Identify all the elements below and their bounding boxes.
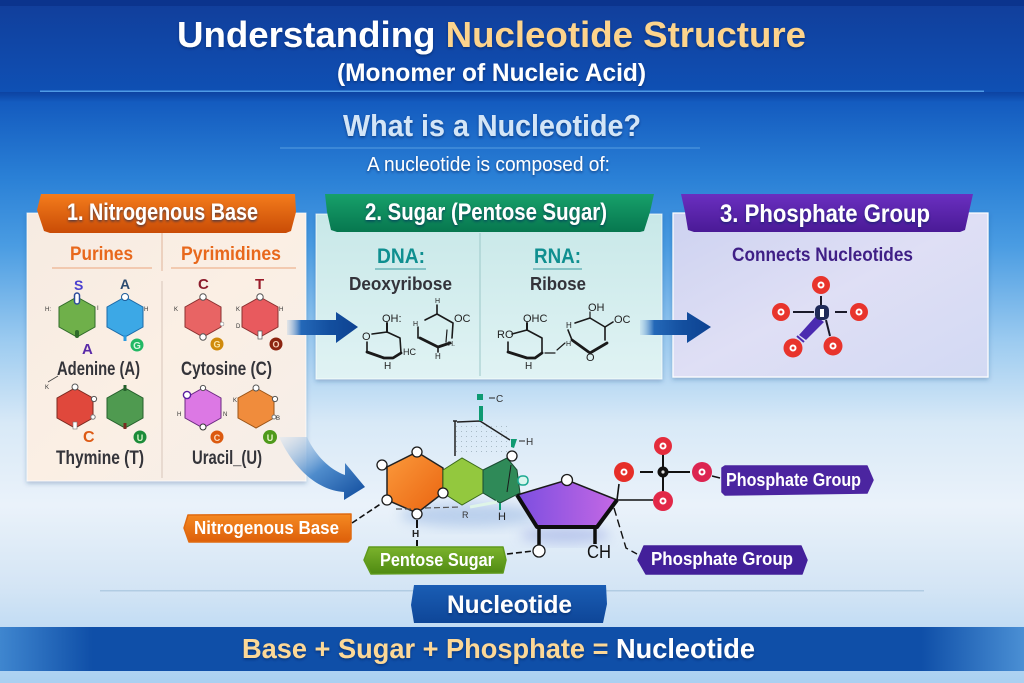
panel: sugar: RO [497,329,514,341]
icon: red pyrimidine hexagon C: K [174,307,178,313]
title: Understanding Nucleotide Structure [177,14,806,55]
hydrogen bond ring: C [496,394,503,405]
icon: orange hexagon: B [276,416,280,422]
arrow: base to sugar [287,312,358,343]
hydrogen bond ring [453,394,533,456]
panel: sugar: H. [448,341,455,348]
icon: red pyrimidine hexagon T: D [236,324,241,330]
section heading: What is a Nucleotide? [343,108,641,143]
icon: orange hexagon [233,385,280,444]
icon: red pyrimidine hexagon T: T [255,276,264,293]
heading: pyrimidines: Pyrimidines [181,244,281,265]
panel: sugar: O [362,331,371,343]
banner: sugar: 2. Sugar (Pentose Sugar) [365,199,607,226]
panel: sugar [316,214,662,379]
panel: nitrogenous base [27,213,306,481]
icon: red pyrimidine hexagon C [174,276,224,350]
label: pentose sugar: Pentose Sugar [380,549,494,570]
panel: sugar: H [566,341,571,348]
label: adenine: Adenine (A) [57,359,140,380]
heading: purines: Purines [70,244,133,265]
diagram: deoxyribose [367,305,453,358]
label: thymine: Thymine (T) [56,448,144,469]
panel: sugar: H [525,361,532,372]
icon: blue purine hexagon: G [133,341,141,352]
icon: purple hexagon: N [223,412,227,418]
phosphate group [614,437,720,511]
badge: nucleotide: Nucleotide [447,591,572,619]
diagram: nucleotide molecule [352,394,720,562]
panel: sugar: H [566,321,572,330]
panel: sugar: O [586,352,595,364]
icon: green purine hexagon [45,277,99,358]
header band [0,0,1024,102]
dark green ring [483,458,520,503]
label: phosphate group bottom [638,546,807,574]
icon: orange hexagon: U [267,433,273,443]
hydrogen bond ring: H [526,437,533,448]
icon: purple hexagon: C [214,433,221,443]
panel: sugar: OHC [523,313,548,325]
icon: red pyrimidine hexagon C: G [213,340,221,350]
diagram: nucleotide molecule: R [462,510,469,520]
light green ring [443,458,483,505]
icon: orange hexagon: K [233,398,237,404]
icon: purple hexagon [177,385,227,444]
diagram: ribose [508,312,613,358]
panel: sugar: HC [403,347,416,357]
panel: sugar: H [413,321,418,328]
purple pentose ring [517,480,617,527]
white atoms [377,447,572,557]
arrow: base to molecule [279,437,365,500]
heading: connects nucleotides: Connects Nucleotides [732,244,913,266]
icon: red hexagon row two: C [83,429,95,446]
icon: purple hexagon: H [177,412,181,418]
label: ribose: Ribose [530,273,586,294]
banner: sugar [325,194,654,232]
heading: rna: RNA: [534,245,581,268]
banner: nitrogenous base: 1. Nitrogenous Base [67,199,258,226]
intro text: A nucleotide is composed of: [367,154,610,176]
orange ring [387,452,443,513]
panel: phosphate [673,213,988,377]
label: phosphate group bottom: Phosphate Group [651,548,793,569]
badge: nucleotide [411,585,607,623]
icon: red pyrimidine hexagon T: O [272,340,280,350]
teal oxygen [518,476,528,485]
icon: red pyrimidine hexagon T: H [279,307,283,313]
diagram: nucleotide molecule: CH [587,542,611,562]
heading: dna: DNA: [377,245,425,268]
label: pentose sugar [364,547,506,574]
panel: sugar: OC [614,314,631,326]
panel: sugar: OC [454,313,471,325]
panel: sugar: OH [588,302,605,314]
icon: blue purine hexagon [107,276,148,352]
banner: nitrogenous base [37,194,296,233]
diagram: nucleotide molecule: H [412,529,419,540]
label: phosphate group top [722,466,873,495]
icon: green purine hexagon: I [97,306,99,312]
label: deoxyribose: Deoxyribose [349,273,452,294]
arrow: sugar to phosphate [640,312,711,343]
icon: green purine hexagon: H: [45,307,51,313]
icon: red hexagon row two [57,384,97,446]
icon: green purine hexagon: A [82,341,93,358]
icon: blue purine hexagon: A [120,276,130,292]
panel: nitrogenous base: K [45,385,49,391]
panel: sugar: H [435,352,441,361]
panel: sugar: H [435,298,440,305]
icon: phosphate molecule [772,276,868,358]
formula band [0,627,1024,671]
label: nitrogenous base: Nitrogenous Base [194,517,339,538]
label: uracil: Uracil_(U) [192,448,262,469]
label: cytosine: Cytosine (C) [181,359,272,380]
icon: red pyrimidine hexagon T [236,276,283,350]
icon: blue purine hexagon: H [144,307,148,313]
icon: red pyrimidine hexagon C: C [198,276,209,293]
panel: sugar: OH: [382,313,402,325]
formula band: Base + Sugar + Phosphate = Nucleotide [242,633,755,664]
panel: sugar: H [384,361,391,372]
banner: phosphate: 3. Phosphate Group [720,200,930,228]
diagram: nucleotide molecule: H [498,511,506,523]
subtitle: (Monomer of Nucleic Acid) [337,59,646,87]
banner: phosphate [681,194,973,232]
label: phosphate group top: Phosphate Group [726,469,861,490]
icon: red pyrimidine hexagon T: K [236,307,240,313]
dashed leaders [352,503,382,523]
icon: green purine hexagon: S [74,277,83,293]
icon: green hexagon row two: U [137,433,143,443]
lower bonds [396,507,460,509]
icon: green hexagon row two [107,385,146,444]
divider line [100,590,924,592]
